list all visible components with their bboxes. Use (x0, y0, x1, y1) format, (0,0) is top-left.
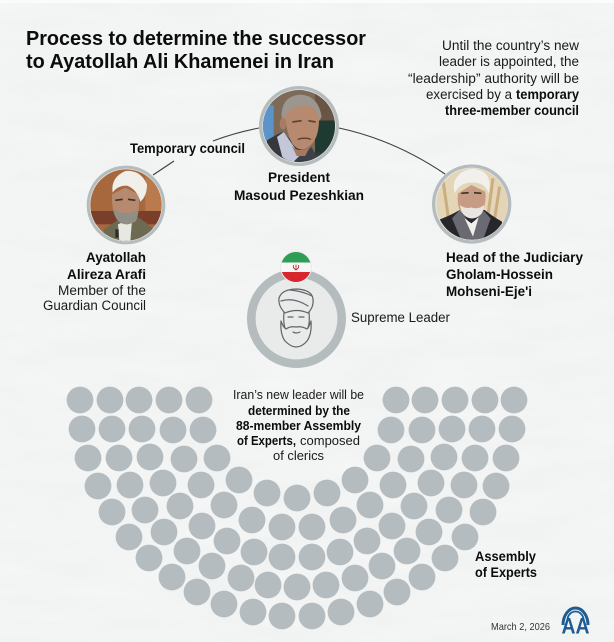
assembly description text: 88-member Assembly (236, 418, 362, 433)
portrait: President Masoud Pezeshkian (259, 86, 339, 166)
icon: supreme leader (251, 273, 342, 364)
label: President Masoud Pezeshkian: President (268, 170, 330, 185)
icon: Iran flag (280, 251, 312, 283)
label: Ayatollah Alireza Arafi: Ayatollah (86, 250, 146, 265)
label: Ayatollah Alireza Arafi: Member of the (58, 283, 146, 298)
date: March 2, 2026 (491, 621, 550, 633)
intro text block: “leadership” authority will be (408, 71, 579, 86)
label: Gholam-Hossein Mohseni-Eje'i: Mohseni-Eje'i (446, 284, 532, 299)
label: assembly of experts: of Experts (475, 565, 537, 580)
assembly description text: Iran’s new leader will be (233, 387, 364, 402)
label: Ayatollah Alireza Arafi (43, 250, 146, 313)
assembly description text: of clerics (273, 448, 324, 463)
logo: Anadolu Agency: AA (562, 614, 590, 638)
intro text block: leader is appointed, the (439, 54, 579, 69)
label: temporary council: Temporary council (130, 141, 245, 156)
intro text block: three-member council (445, 103, 579, 118)
label: supreme leader: Supreme Leader (351, 310, 450, 325)
intro text block: temporary (516, 87, 579, 102)
council connector lines (153, 128, 445, 175)
label: Ayatollah Alireza Arafi: Alireza Arafi (67, 267, 146, 282)
title (26, 27, 366, 73)
label: assembly of experts: Assembly (475, 549, 536, 564)
label: Ayatollah Alireza Arafi: Guardian Council (43, 298, 146, 313)
assembly description text: determined by the (248, 403, 350, 418)
label: President Masoud Pezeshkian (234, 170, 364, 203)
label: assembly of experts (475, 549, 537, 580)
label: Gholam-Hossein Mohseni-Eje'i: Gholam-Hossein (446, 267, 553, 282)
title: to Ayatollah Ali Khamenei in Iran (26, 50, 334, 73)
label: President Masoud Pezeshkian: Masoud Pezeshkian (234, 188, 364, 203)
seat chart: assembly of experts (67, 387, 527, 629)
assembly description text: of Experts, (237, 433, 296, 448)
assembly description text: composed (300, 433, 360, 448)
portrait: Ayatollah Alireza Arafi (87, 166, 165, 244)
title: Process to determine the successor (26, 27, 366, 50)
assembly description text (233, 387, 364, 463)
intro text block: exercised by a (426, 87, 512, 102)
label: Gholam-Hossein Mohseni-Eje'i: Head of the Judiciary (446, 250, 583, 265)
portrait: Gholam-Hossein Mohseni-Eje'i (432, 164, 511, 244)
label: Gholam-Hossein Mohseni-Eje'i (446, 250, 583, 299)
intro text block: Until the country’s new (442, 38, 579, 53)
intro text block (408, 38, 579, 118)
